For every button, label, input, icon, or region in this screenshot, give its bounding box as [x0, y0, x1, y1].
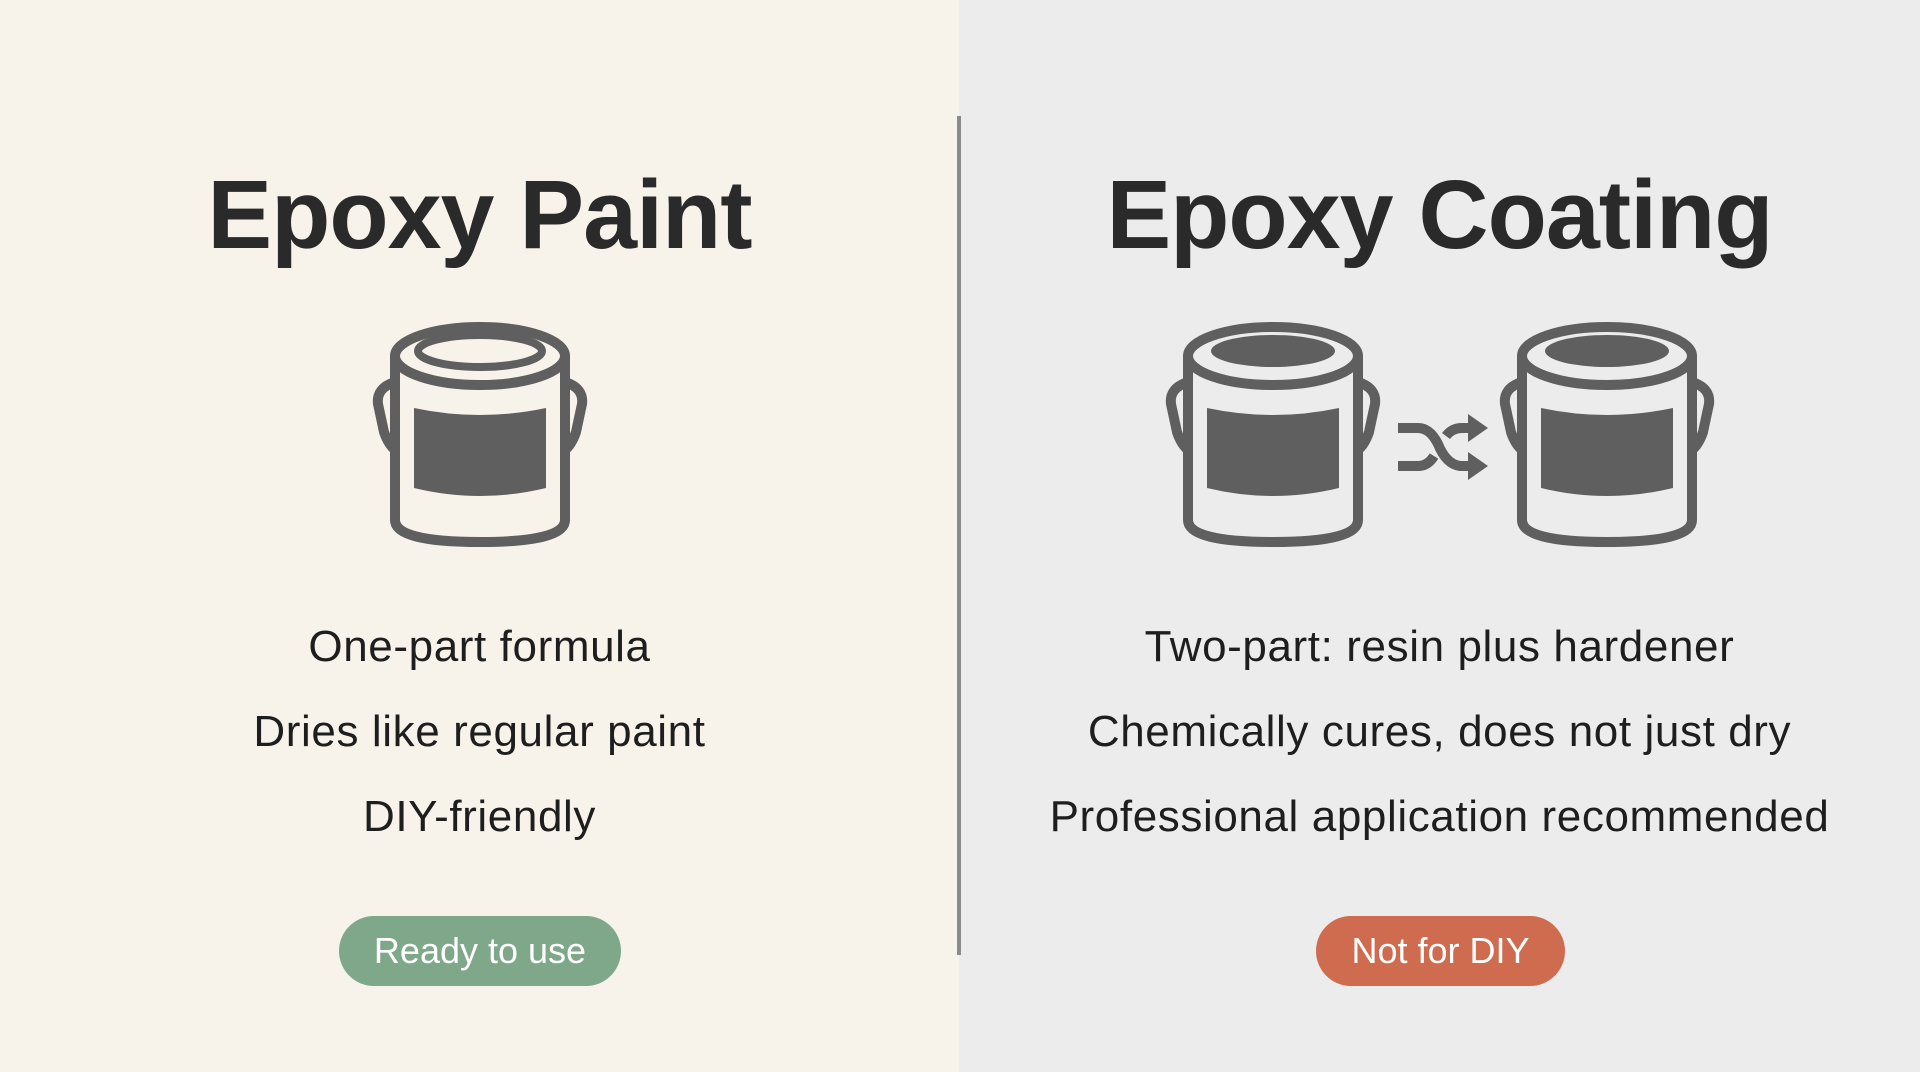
icon: shuffle arrows [1398, 414, 1488, 480]
badge: Ready to use [339, 916, 621, 986]
icon: can 1 [1166, 322, 1380, 547]
badge: Not for DIY [1316, 916, 1565, 986]
panel: epoxy coating [959, 0, 1920, 1072]
text: Two-part: Two-part: resin plus hardener [1145, 622, 1734, 671]
panel: epoxy paint [0, 0, 959, 1072]
text: One-part formula: One-part formula [308, 622, 651, 671]
badge: Not for DIY: Not for DIY [1351, 930, 1530, 971]
title: Epoxy Coating: Epoxy Coating [1106, 160, 1773, 269]
title: Epoxy Paint: Epoxy Paint [207, 160, 752, 269]
text: Dries like regular paint: Dries like regular paint [253, 707, 706, 756]
text: DIY-friendly: DIY-friendly [363, 792, 596, 841]
text: Professional application: Professional application recommended [1050, 792, 1829, 841]
text: Chemically cures: Chemically cures, does not just dry [1088, 707, 1791, 756]
icon: paint can [372, 322, 588, 547]
icon: can 2 [1500, 322, 1714, 547]
badge: Ready to use: Ready to use [374, 930, 586, 971]
